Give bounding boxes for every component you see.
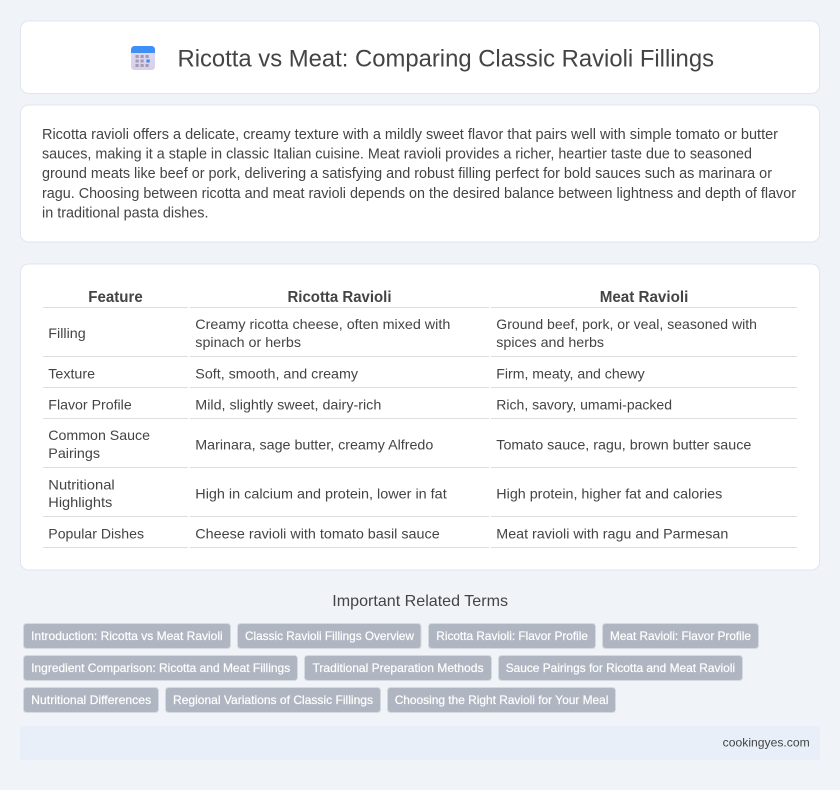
row: nutritional highlights: Nutritional bbox=[48, 476, 115, 492]
row: filling: spices and herbs bbox=[496, 334, 604, 350]
related term chips bbox=[24, 624, 758, 712]
row: texture: Texture bbox=[48, 365, 95, 381]
chip: ricotta flavor: Ricotta Ravioli: Flavor Profile bbox=[436, 629, 588, 643]
row: nutritional highlights bbox=[48, 476, 722, 510]
chip: introduction: Introduction: Ricotta vs Meat Ravioli bbox=[31, 629, 223, 643]
row: common sauce pairings: Common Sauce bbox=[48, 427, 150, 443]
chip: choosing bbox=[388, 688, 616, 712]
chip: ingredient comparison bbox=[24, 656, 298, 680]
row: flavor profile: Rich, savory, umami-packed bbox=[496, 396, 672, 412]
row: popular dishes: Popular Dishes bbox=[48, 525, 144, 541]
intro paragraph bbox=[42, 127, 796, 221]
row: common sauce pairings: Tomato sauce, ragu, brown butter sauce bbox=[496, 436, 752, 452]
chip: regional bbox=[166, 688, 380, 712]
intro paragraph: ground meats like beef or pork, delivering a satisfying and robust filling perfect for bold sauces such as marinara or bbox=[42, 166, 772, 182]
chip: introduction bbox=[24, 624, 230, 648]
table header row: Feature bbox=[88, 289, 143, 306]
panel: introduction bbox=[20, 105, 820, 242]
row: nutritional highlights: High protein, higher fat and calories bbox=[496, 485, 722, 501]
chip: sauce pairings: Sauce Pairings for Ricotta and Meat Ravioli bbox=[506, 661, 735, 675]
chip: overview bbox=[238, 624, 421, 648]
row: texture: Soft, smooth, and creamy bbox=[195, 365, 358, 381]
row: filling bbox=[48, 316, 757, 350]
intro paragraph: ragu. Choosing between ricotta and meat ravioli depends on the desired balance between lightness and depth of flavor bbox=[42, 186, 796, 202]
chip: ingredient comparison: Ingredient Comparison: Ricotta and Meat Fillings bbox=[31, 661, 290, 675]
row: flavor profile bbox=[48, 396, 672, 412]
row: popular dishes: Meat ravioli with ragu and Parmesan bbox=[496, 525, 728, 541]
chip: meat flavor: Meat Ravioli: Flavor Profile bbox=[610, 629, 751, 643]
row: popular dishes bbox=[48, 525, 728, 541]
row: common sauce pairings: Marinara, sage butter, creamy Alfredo bbox=[195, 436, 434, 452]
chip: regional: Regional Variations of Classic Fillings bbox=[173, 693, 373, 707]
row: filling: Filling bbox=[48, 325, 86, 341]
heading: important related terms: Important Related Terms bbox=[332, 593, 508, 610]
row: filling: Ground beef, pork, or veal, seasoned with bbox=[496, 316, 757, 332]
panel: header bbox=[20, 21, 820, 94]
icon: calendar bbox=[131, 46, 155, 70]
chip: nutritional bbox=[24, 688, 158, 712]
row: flavor profile: Flavor Profile bbox=[48, 396, 132, 412]
row: common sauce pairings bbox=[48, 427, 752, 461]
table header row bbox=[88, 289, 688, 306]
row: texture bbox=[48, 365, 645, 381]
row: nutritional highlights: Highlights bbox=[48, 494, 112, 510]
row: filling: spinach or herbs bbox=[195, 334, 301, 350]
row: nutritional highlights: High in calcium and protein, lower in fat bbox=[195, 485, 447, 501]
chip: meat flavor bbox=[602, 624, 758, 648]
intro paragraph: Ricotta ravioli offers a delicate, creamy texture with a mildly sweet flavor that pairs well with simple tomato or butter bbox=[42, 127, 778, 143]
row: flavor profile: Mild, slightly sweet, dairy-rich bbox=[195, 396, 381, 412]
table header row: Ricotta Ravioli bbox=[288, 289, 392, 306]
row: common sauce pairings: Pairings bbox=[48, 445, 100, 461]
row: filling: Creamy ricotta cheese, often mixed with bbox=[195, 316, 450, 332]
row: popular dishes: Cheese ravioli with tomato basil sauce bbox=[195, 525, 440, 541]
panel: comparison table bbox=[20, 264, 820, 570]
chip: nutritional: Nutritional Differences bbox=[31, 693, 151, 707]
chip: preparation bbox=[304, 656, 492, 680]
chip: sauce pairings bbox=[498, 656, 742, 680]
row: texture: Firm, meaty, and chewy bbox=[496, 365, 645, 381]
title: Ricotta vs Meat: Comparing Classic Ravioli Fillings bbox=[178, 46, 714, 73]
intro paragraph: in traditional pasta dishes. bbox=[42, 205, 208, 221]
chip: preparation: Traditional Preparation Methods bbox=[312, 661, 484, 675]
footer bbox=[20, 726, 820, 760]
chip: choosing: Choosing the Right Ravioli for Your Meal bbox=[395, 693, 608, 707]
table header row: Meat Ravioli bbox=[600, 289, 688, 306]
chip: overview: Classic Ravioli Fillings Overview bbox=[245, 629, 414, 643]
footer source: cookingyes.com bbox=[723, 736, 810, 750]
intro paragraph: sauces, making it a staple in classic Italian cuisine. Meat ravioli provides a richer, heartier taste due to seasoned bbox=[42, 147, 752, 163]
chip: ricotta flavor bbox=[428, 624, 596, 648]
